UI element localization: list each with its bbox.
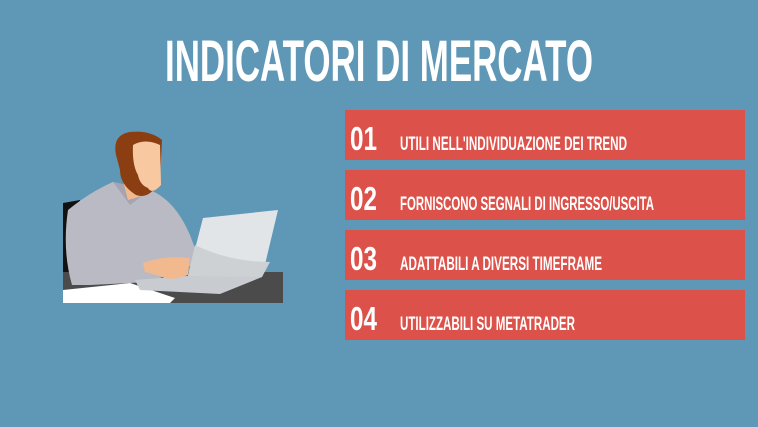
hand bbox=[143, 257, 190, 279]
face bbox=[133, 142, 161, 191]
item 04 bbox=[345, 290, 745, 340]
item 02: 02 bbox=[350, 180, 377, 217]
laptop base bbox=[135, 276, 262, 294]
paper bbox=[63, 283, 175, 303]
item 03: 03 bbox=[350, 240, 377, 277]
item 03: ADATTABILI A DIVERSI TIMEFRAME bbox=[400, 254, 602, 275]
shirt body bbox=[66, 182, 200, 285]
hair/beard bbox=[115, 132, 162, 196]
item 01 bbox=[345, 110, 745, 160]
chair bbox=[63, 200, 80, 300]
laptop screen bbox=[186, 210, 278, 284]
item 02 bbox=[345, 170, 745, 220]
item 04: 04 bbox=[350, 300, 377, 337]
item 03 bbox=[345, 230, 745, 280]
desk bbox=[63, 272, 283, 303]
item 04: UTILIZZABILI SU METATRADER bbox=[400, 314, 575, 335]
illustration: man at laptop bbox=[63, 132, 283, 303]
item 01: 01 bbox=[350, 120, 377, 157]
neck bbox=[120, 170, 148, 200]
